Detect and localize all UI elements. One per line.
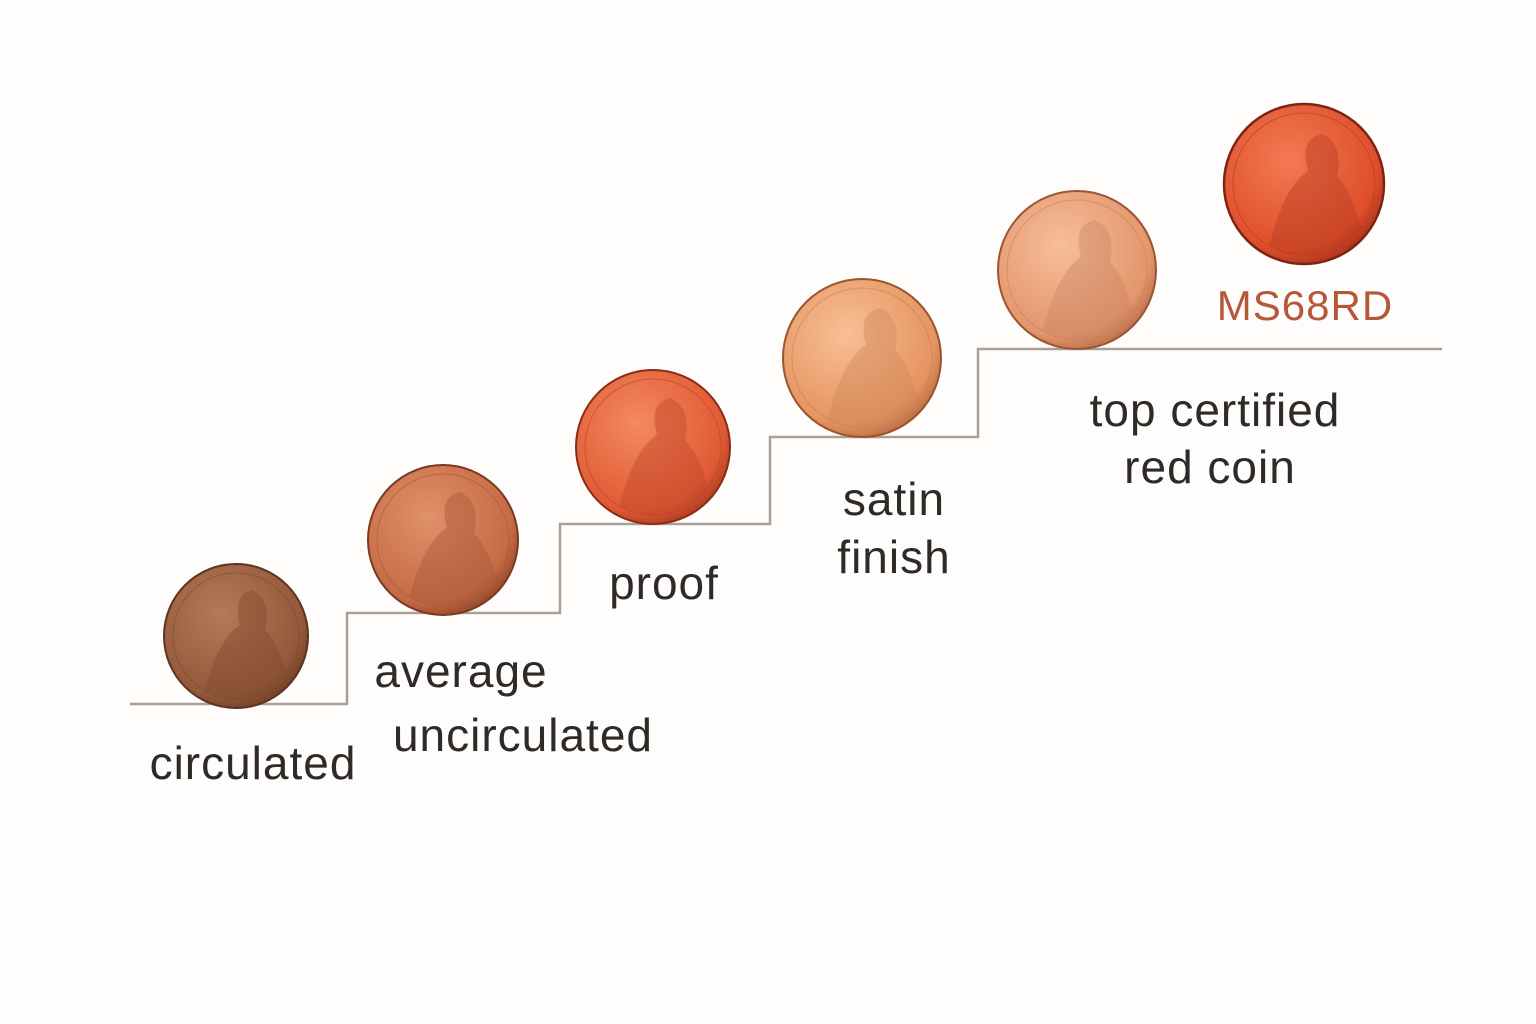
label: circulated: circulated bbox=[150, 737, 356, 789]
label: satin finish bbox=[837, 473, 951, 583]
coin: top certified red coin bbox=[998, 191, 1156, 352]
label: satin finish: satin bbox=[843, 473, 945, 525]
label: proof: proof bbox=[609, 557, 719, 609]
label: average uncirculated: uncirculated bbox=[393, 709, 653, 761]
label: MS68RD: MS68RD bbox=[1217, 282, 1393, 329]
coin: MS68RD bbox=[1224, 104, 1384, 266]
coin: circulated bbox=[164, 564, 308, 710]
coin: satin finish bbox=[783, 279, 941, 440]
label: average uncirculated: average bbox=[374, 645, 548, 697]
coin: average uncirculated bbox=[368, 465, 518, 615]
staircase line bbox=[130, 349, 1442, 704]
label: top certified red coin: red coin bbox=[1124, 441, 1296, 493]
label: top certified red coin: top certified bbox=[1090, 384, 1340, 436]
label: average uncirculated bbox=[374, 645, 653, 761]
coin: proof bbox=[576, 370, 730, 525]
label: satin finish: finish bbox=[837, 531, 951, 583]
label: top certified red coin bbox=[1090, 384, 1340, 493]
